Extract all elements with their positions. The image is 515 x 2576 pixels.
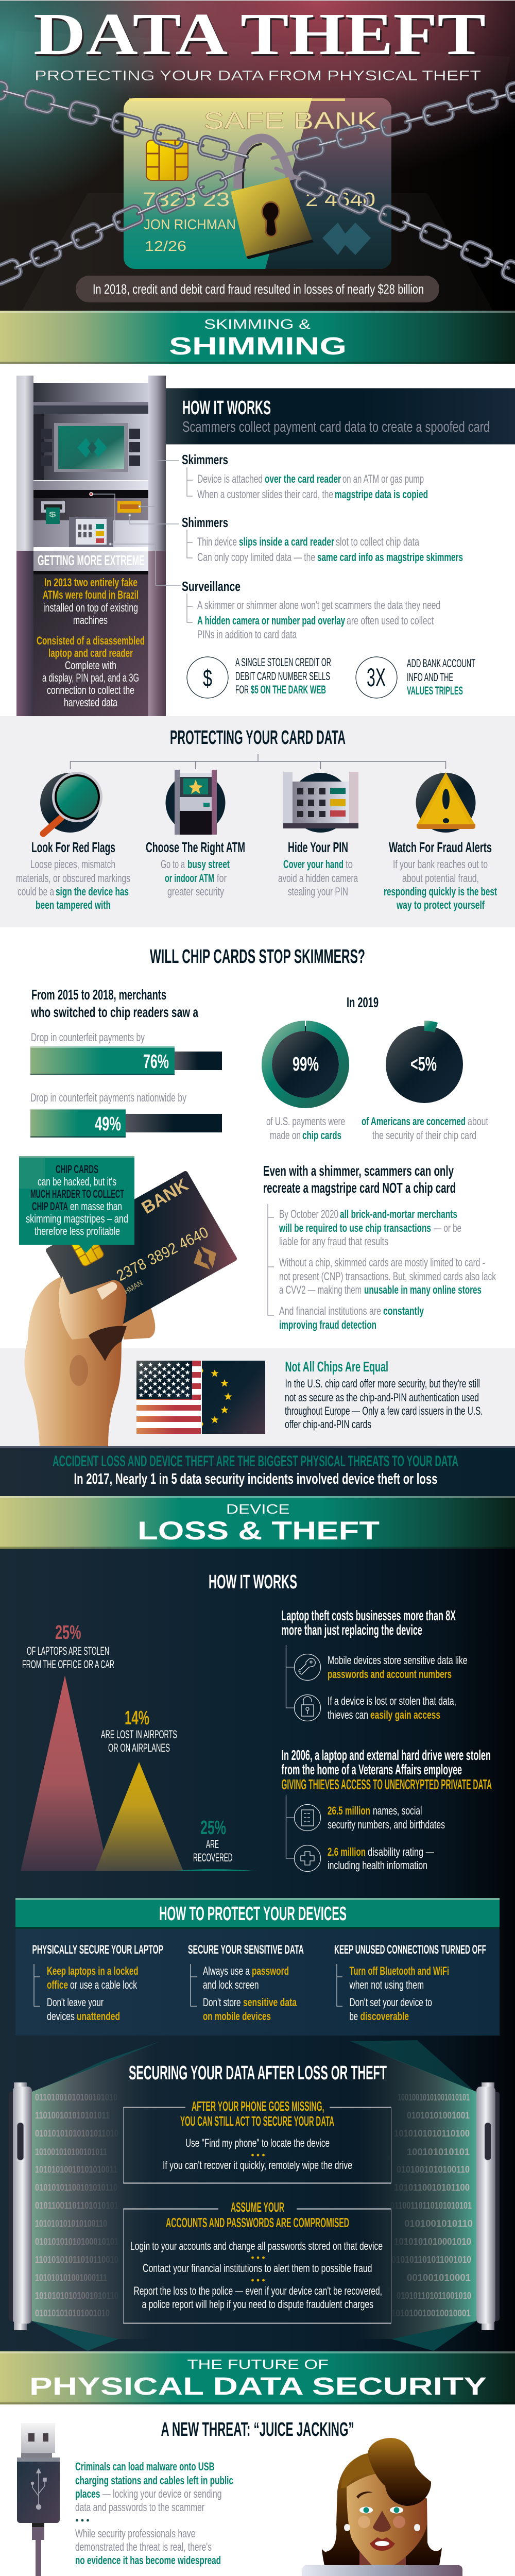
tip: watch for fraud alerts: about potential fraud, [402, 872, 479, 885]
text: 2006 veterans affairs theft: 26.5 million [328, 1804, 370, 1817]
box: after your phone goes missing: YOU CAN STILL ACT TO SECURE YOUR DATA [180, 2113, 334, 2129]
icon: magnifier [40, 772, 102, 834]
panel: getting more extreme: a display, PIN pad, and a 3G [42, 671, 139, 684]
text: surveillance: A hidden camera or number pad overlay [197, 614, 346, 627]
mouth [370, 2537, 395, 2551]
column: secure your sensitive data [188, 1943, 304, 2023]
text: 2006 veterans affairs theft: names, social [373, 1804, 422, 1817]
stat: five dollars: $ [203, 665, 212, 691]
text: not all chips are equal [285, 1359, 483, 1431]
donut chart: under 5 percent [362, 1021, 488, 1142]
binary stream: right: 010101101011001010 [391, 2255, 471, 2265]
title foreground: DATA THEFT [33, 2, 486, 67]
panel: getting more extreme: GETTING MORE EXTREME [38, 552, 145, 568]
binary stream: left: 11010101011010110010 [35, 2255, 118, 2265]
binary stream: left: 01010101010100010101 [35, 2236, 118, 2247]
text: skimmers: Skimmers [182, 452, 228, 467]
stat: 3X: INFO AND THE [407, 671, 453, 684]
text: surveillance: PINs in addition to card data [197, 628, 297, 641]
text: 2006 veterans affairs theft: 2.6 million [328, 1845, 366, 1858]
stat: five dollars: DEBIT CARD NUMBER SELLS [235, 670, 330, 683]
text: even with a shimmer: a CVV2 — making them [279, 1283, 362, 1296]
bar chart: counterfeit drop: Drop in counterfeit payments nationwide by [30, 1091, 186, 1104]
card reader [117, 501, 141, 513]
text: shimmers: Thin device [197, 535, 237, 548]
text: shimmers: Can only copy limited data — the [197, 551, 315, 564]
text: criminals load malware: data and passwords to the scammer [75, 2501, 204, 2514]
text: shimmers: slot to collect chip data [336, 535, 420, 548]
panel: getting more extreme: Complete with [65, 659, 116, 672]
text: shimmers: Shimmers [182, 515, 228, 530]
panel: how to protect your devices [15, 1898, 500, 2036]
binary stream: left: 01101001010100101010 [35, 2092, 117, 2103]
binary stream: left: 110100101010101011 [35, 2110, 110, 2121]
binary stream: left: 101010101001000111 [35, 2273, 107, 2283]
text: laptop theft costs: thieves can [328, 1708, 368, 1721]
donut chart: under 5 percent: <5% [410, 1054, 437, 1075]
bar chart: counterfeit drop: who switched to chip readers saw a [30, 1004, 198, 1020]
card number: 2 4640 [305, 189, 375, 211]
card name: JON RICHMAN [144, 216, 236, 232]
column: secure your sensitive data: and lock screen [203, 1978, 259, 1991]
credit card [124, 98, 391, 269]
binary stream: right: 100101010101 [407, 2147, 470, 2157]
hero panel [0, 0, 515, 311]
text: criminals load malware: charging stations and cables left in public [75, 2474, 233, 2487]
banner: future of physical data security: THE FUTURE OF [187, 2357, 329, 2372]
keypad [69, 517, 113, 547]
stat: 3X [356, 657, 475, 698]
box: after your phone goes missing: If you can't recover it quickly, remotely wipe the drive [163, 2159, 352, 2172]
donut chart: 99 percent [266, 1021, 345, 1142]
text: shimmers [182, 515, 463, 564]
tip: look for red flags: Loose pieces, mismatch [30, 858, 115, 871]
panel: getting more extreme: connection to collect the [47, 684, 134, 697]
text: criminals load malware: demonstrated the threat is real, there's [75, 2540, 212, 2553]
column: physically secure your laptop: PHYSICALLY SECURE YOUR LAPTOP [32, 1943, 163, 1957]
stat pill [76, 276, 439, 302]
chart: laptop theft triangles: 25% [200, 1817, 226, 1839]
heading: how it works: HOW IT WORKS [209, 1571, 297, 1593]
banner: future of physical data security: PHYSICAL DATA SECURITY [29, 2373, 487, 2400]
illustration: shocked woman [322, 2438, 442, 2565]
banner: future of physical data security [0, 2351, 515, 2404]
heading: will chip cards stop skimmers: WILL CHIP CARDS STOP SKIMMERS? [150, 946, 365, 968]
icon: medical cross [295, 1845, 320, 1871]
panel: getting more extreme: Consisted of a disassembled [37, 634, 145, 647]
text: even with a shimmer: By October 2020 [279, 1208, 338, 1221]
column: keep unused connections turned off: discoverable [360, 2010, 409, 2023]
binary stream: right: 0101001010110 [404, 2218, 473, 2229]
callout: chip cards: skimming magstripes – and [26, 1212, 128, 1225]
ATM pillars [16, 376, 166, 716]
banner: skimming and shimming [0, 311, 515, 364]
tip: choose the right ATM [146, 839, 245, 898]
donut chart: 99 percent: 99% [293, 1054, 319, 1075]
tip: hide your PIN: to [346, 858, 353, 871]
donut chart: under 5 percent: about [468, 1115, 488, 1128]
text: criminals load malware: no evidence it has become widespread [75, 2554, 221, 2567]
binary stream: left: 10101010101001010110 [35, 2291, 118, 2301]
column: physically secure your laptop: devices [47, 2010, 75, 2023]
banner: skimming and shimming: SHIMMING [169, 333, 347, 360]
panel heading: HOW TO PROTECT YOUR DEVICES [159, 1903, 347, 1925]
icon: document [295, 1804, 320, 1831]
text: surveillance [182, 579, 440, 641]
panel: getting more extreme: ATMs were found in Brazil [43, 588, 139, 601]
panel: not all chips are equal background [0, 1348, 515, 1446]
chart: laptop theft triangles [21, 1622, 258, 1871]
text: not all chips are equal: offer chip-and-PIN cards [285, 1418, 371, 1431]
column: secure your sensitive data: SECURE YOUR SENSITIVE DATA [188, 1943, 304, 1957]
text: even with a shimmer: all brick-and-mortar merchants [340, 1208, 457, 1221]
tip: choose the right ATM: busy street [187, 858, 230, 871]
chart: laptop theft triangles: FROM THE OFFICE OR A CAR [22, 1658, 114, 1671]
binary stream: right: 01010101001001 [407, 2110, 470, 2121]
stat: five dollars: FOR [235, 683, 249, 696]
bar chart: counterfeit drop: 76% [143, 1051, 169, 1073]
heading: in 2019: In 2019 [347, 994, 379, 1010]
binary stream: right: 1010101010001010 [394, 2236, 471, 2247]
column: physically secure your laptop: Keep laptops in a locked [47, 1964, 138, 1977]
bar chart: counterfeit drop [30, 987, 222, 1138]
panel: protecting your card data [0, 716, 515, 927]
icon: unlocked padlock [295, 1695, 320, 1721]
callout: chip cards: therefore less profitable [35, 1225, 120, 1238]
cash slot [41, 501, 65, 524]
callout: chip cards [19, 1156, 134, 1253]
tip: hide your PIN [278, 839, 358, 898]
column: keep unused connections turned off: Don't set your device to [349, 1996, 432, 2009]
chart: laptop theft triangles: RECOVERED [193, 1851, 233, 1864]
text: even with a shimmer: — or be [434, 1222, 461, 1234]
card number text: 2378 3892 4640 [114, 1224, 211, 1284]
text: criminals load malware: — locking your device or sending [102, 2487, 221, 2500]
card logo [322, 223, 371, 255]
binary stream: left [35, 2092, 118, 2318]
donut chart: under 5 percent: of Americans are concerned [362, 1115, 466, 1128]
tip: hide your PIN: avoid a hidden camera [278, 872, 358, 885]
binary stream: right: 10010010101001010101 [398, 2092, 470, 2103]
binary stream: left: 01010101100101010110 [35, 2182, 117, 2193]
tip: look for red flags: could be a [18, 885, 55, 898]
panel: getting more extreme: In 2013 two entirely fake [44, 576, 138, 589]
heading: PROTECTING YOUR CARD DATA [170, 727, 346, 749]
icon: US and EU flags [136, 1361, 265, 1434]
donut chart: 99 percent: made on [270, 1129, 301, 1142]
glow between phones [32, 2040, 476, 2351]
illustration: hand holding card [24, 1174, 234, 1446]
bar chart: counterfeit drop: 49% [95, 1113, 121, 1135]
column: keep unused connections turned off [334, 1943, 486, 2023]
binary stream: right: 0101001010100110 [397, 2164, 470, 2175]
box: assume your accounts are compromised: ACCOUNTS AND PASSWORDS ARE COMPROMISED [166, 2215, 349, 2230]
icon: keypad [283, 772, 358, 833]
title: DATA THEFT [35, 4, 487, 70]
tip: look for red flags: Look For Red Flags [31, 839, 115, 855]
text: skimmers: Device is attached [197, 472, 263, 485]
binary stream: right: 001001010001 [407, 2273, 471, 2283]
binary stream: right: 1010110010101100 [394, 2182, 470, 2193]
how it works band: HOW IT WORKS [182, 397, 271, 419]
illustration: USB plug [17, 2423, 515, 2576]
box: assume your accounts are compromised: Contact your financial institutions to alert them to possible fraud [143, 2262, 372, 2275]
icon: right phone [476, 2082, 500, 2330]
donut chart: 99 percent: chip cards [302, 1129, 341, 1142]
text: skimmers: over the card reader [265, 472, 341, 485]
box: assume your accounts are compromised: ASSUME YOUR [231, 2199, 284, 2215]
binary stream: left: 101010101010100110 [35, 2218, 107, 2229]
panel: getting more extreme: harvested data [64, 696, 118, 709]
tip: choose the right ATM: greater security [167, 885, 224, 898]
subtitle: PROTECTING YOUR DATA FROM PHYSICAL THEFT [35, 67, 481, 83]
banner: skimming and shimming: SKIMMING & [204, 316, 311, 332]
binary stream: left: 101001010100101011 [35, 2147, 107, 2157]
box: after your phone goes missing [124, 2098, 391, 2183]
cardholder name: HMAN [123, 1279, 144, 1296]
tip: choose the right ATM: Choose The Right ATM [146, 839, 245, 855]
text: criminals load malware: Criminals can load malware onto USB [75, 2460, 214, 2473]
stat: 3X: VALUES TRIPLES [407, 684, 463, 697]
text: even with a shimmer: improving fraud detection [279, 1318, 376, 1331]
binary stream: left: 010101010101001010 [35, 2308, 110, 2318]
text: shimmers: slips inside a card reader [239, 535, 334, 548]
callout: chip cards: can be hacked, but it's [38, 1175, 116, 1188]
text: skimmers: magstripe data is copied [335, 488, 428, 501]
ATM side buttons [41, 429, 140, 466]
column: secure your sensitive data: on mobile devices [203, 2010, 271, 2023]
tip: hide your PIN: stealing your PIN [288, 885, 348, 898]
card expiry: 12/26 [145, 238, 186, 254]
eyes [359, 2507, 403, 2513]
binary stream: right: 1010101010110100 [394, 2128, 470, 2139]
panel: getting more extreme: installed on top of existing [43, 601, 138, 614]
connector lines [90, 461, 181, 585]
padlock [231, 138, 314, 259]
stat: 3X: 3X [367, 663, 386, 692]
column: physically secure your laptop: unattended [77, 2010, 120, 2023]
column: keep unused connections turned off: Turn off Bluetooth and WiFi [349, 1964, 449, 1977]
column: keep unused connections turned off: when not using them [349, 1978, 424, 1991]
text: skimmers: on an ATM or gas pump [342, 472, 424, 485]
stat pill: In 2018, credit and debit card fraud resulted in losses of nearly $28 billion [93, 281, 424, 297]
panel: getting more extreme: laptop and card reader [48, 647, 133, 659]
box: assume your accounts are compromised [124, 2199, 391, 2324]
callout band: accident loss [0, 1446, 515, 1496]
card number [143, 189, 375, 211]
icon: USB symbol [31, 2469, 46, 2509]
binary stream: right: 01100110110101010101 [390, 2200, 472, 2211]
text: not all chips are equal: Not All Chips Are Equal [285, 1359, 388, 1375]
card number: 7328 23 [143, 189, 230, 211]
text: criminals load malware [75, 2460, 233, 2567]
card text: BANK [139, 1175, 192, 1218]
text: surveillance: Surveillance [182, 579, 241, 594]
column: physically secure your laptop: office [47, 1978, 68, 1991]
stat: five dollars: A SINGLE STOLEN CREDIT OR [235, 656, 331, 669]
box: assume your accounts are compromised: a police report will help if you need to dispute fraudulent charges [142, 2298, 373, 2311]
tip: look for red flags [16, 839, 130, 911]
callout: chip cards: MUCH HARDER TO COLLECT [30, 1188, 124, 1200]
panel: getting more extreme [33, 551, 148, 716]
chart: laptop theft triangles: 25% [55, 1622, 81, 1643]
banner: device loss and theft: DEVICE [226, 1501, 289, 1517]
card bank name: SAFE BANK [203, 107, 377, 134]
banner: device loss and theft: LOSS & THEFT [138, 1516, 380, 1545]
tip: watch for fraud alerts [384, 839, 497, 911]
text: criminals load malware: While security professionals have [75, 2527, 196, 2540]
text: laptop theft costs: easily gain access [370, 1708, 440, 1721]
icon: ATM [166, 770, 226, 835]
icon: left phone [9, 2082, 32, 2330]
text: 2006 veterans affairs theft: including health information [328, 1859, 427, 1872]
column: keep unused connections turned off: be [349, 2010, 358, 2023]
text: 2006 veterans affairs theft: disability rating — [368, 1845, 434, 1858]
illustration: ATM [16, 376, 181, 716]
stat: five dollars: $5 ON THE DARK WEB [251, 683, 326, 696]
box: assume your accounts are compromised: Report the loss to the police — even if your device can't be recovered, [134, 2284, 382, 2297]
dark section background [0, 1549, 515, 2351]
chart: laptop theft triangles: OR ON AIRPLANES [108, 1741, 170, 1754]
text: skimmers: When a customer slides their card, the [197, 488, 333, 501]
column: secure your sensitive data: password [252, 1964, 289, 1977]
binary stream: right: 010101101011001010 [397, 2291, 471, 2301]
chip [146, 140, 188, 180]
card chip [70, 1229, 105, 1267]
text: even with a shimmer: will be required to use chip transactions [279, 1222, 431, 1234]
column: physically secure your laptop: or use a cable lock [70, 1978, 138, 1991]
binary stream: right [390, 2092, 473, 2318]
column: secure your sensitive data: Always use a [203, 1964, 250, 1977]
text: skimmers [182, 452, 428, 501]
tip: hide your PIN: Cover your hand [283, 858, 344, 871]
tip: hide your PIN: Hide Your PIN [288, 839, 348, 855]
column: secure your sensitive data: sensitive data [243, 1996, 297, 2009]
donut chart: under 5 percent: the security of their chip card [372, 1129, 476, 1142]
box: assume your accounts are compromised: Login to your accounts and change all passwords stored on that device [130, 2240, 383, 2252]
bar chart: counterfeit drop: Drop in counterfeit payments by [31, 1031, 145, 1044]
text: 2006 veterans affairs theft: security numbers, and birthdates [328, 1818, 445, 1831]
tip: choose the right ATM: for [217, 872, 227, 885]
binary stream: left: 01011001101101010101 [35, 2200, 118, 2211]
illustration: charging stand [279, 2565, 485, 2576]
text: even with a shimmer: constantly [383, 1304, 424, 1317]
icon: key [295, 1654, 320, 1681]
ATM screen [54, 423, 128, 472]
thumb [59, 1276, 126, 1340]
bar chart: counterfeit drop: From 2015 to 2018, merchants [31, 987, 166, 1003]
heading: juice jacking: A NEW THREAT: “JUICE JACKING” [161, 2419, 354, 2441]
text: even with a shimmer: liable for any fraud that results [279, 1235, 388, 1248]
banner: device loss and theft [0, 1496, 515, 1549]
callout: chip cards: en masse than [70, 1200, 122, 1213]
chart: laptop theft triangles: OF LAPTOPS ARE STOLEN [27, 1645, 109, 1657]
text: laptop theft costs [281, 1607, 468, 1721]
chains [0, 73, 515, 295]
text: surveillance: are often used to collect [347, 614, 434, 627]
panel: getting more extreme: machines [73, 614, 108, 626]
text: even with a shimmer: And financial institutions are [279, 1304, 381, 1317]
icon: warning [416, 772, 476, 833]
stat: five dollars [187, 656, 331, 698]
callout: chip cards: CHIP DATA [32, 1200, 68, 1213]
column: secure your sensitive data: Don't store [203, 1996, 241, 2009]
donut chart: 99 percent: of U.S. payments were [266, 1115, 345, 1128]
tip: choose the right ATM: Go to a [161, 858, 185, 871]
chart: laptop theft triangles: ARE LOST IN AIRPORTS [101, 1728, 177, 1741]
tip: choose the right ATM: or indoor ATM [165, 872, 214, 885]
how it works band [166, 388, 515, 445]
text: laptop theft costs: passwords and account numbers [328, 1668, 452, 1681]
chart: laptop theft triangles: 14% [125, 1707, 149, 1729]
callout: chip cards: CHIP CARDS [56, 1163, 98, 1176]
binary stream: left: 10101010010101010011 [35, 2164, 117, 2175]
column: physically secure your laptop [32, 1943, 163, 2023]
text: criminals load malware: places [75, 2487, 100, 2500]
text: 2006 veterans affairs theft [281, 1747, 492, 1872]
tip: look for red flags: materials, or obscured markings [16, 872, 130, 885]
binary stream: right: 101010010010010001 [391, 2308, 471, 2318]
binary stream: left: 01010101010101011010 [35, 2128, 118, 2139]
tip: look for red flags: sign the device has [56, 885, 129, 898]
box: after your phone goes missing: AFTER YOUR PHONE GOES MISSING, [192, 2098, 324, 2114]
box: after your phone goes missing: Use "Find my phone" to locate the device [185, 2137, 330, 2149]
card logo mark [188, 1241, 222, 1275]
chart: laptop theft triangles: ARE [206, 1838, 219, 1851]
column: physically secure your laptop: Don't leave your [47, 1996, 104, 2009]
tip: look for red flags: been tampered with [36, 899, 111, 911]
text: even with a shimmer [263, 1163, 496, 1331]
cash slot: $ [49, 510, 56, 518]
text: laptop theft costs: If a device is lost or stolen that data, [328, 1694, 456, 1707]
